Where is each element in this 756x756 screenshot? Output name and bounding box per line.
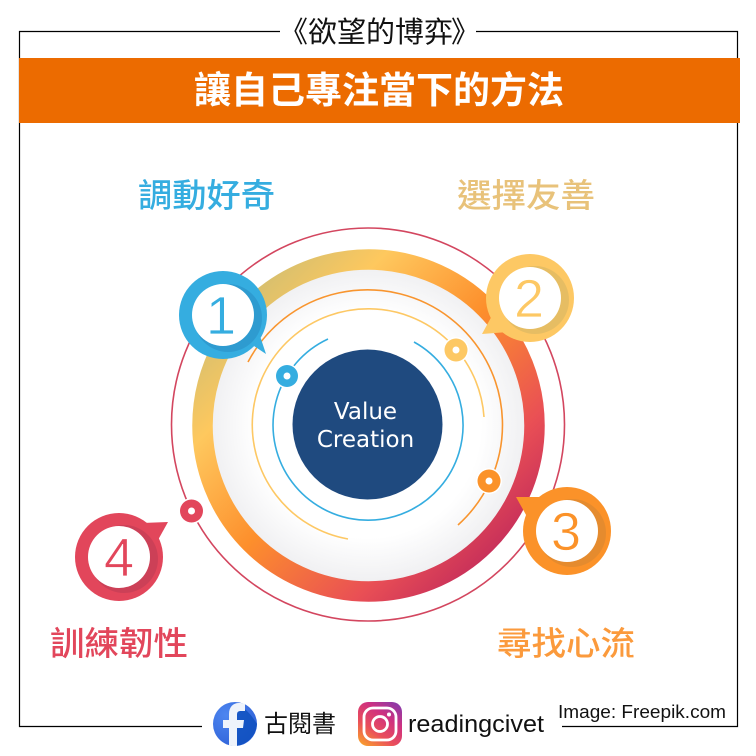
yellow arc — [252, 309, 484, 539]
outer thin ring — [172, 228, 564, 621]
badge 3 — [516, 487, 611, 575]
series title: 《 — [279, 17, 308, 49]
label 4: 訓練韌性 — [50, 625, 188, 662]
marker dot: yellow — [443, 337, 469, 363]
series title: 欲望的博弈 — [308, 16, 453, 49]
badge 3: 3 — [551, 502, 581, 562]
instagram handle: readingcivet — [408, 711, 544, 738]
marker dot: orange — [476, 468, 502, 494]
series title: 》 — [451, 17, 480, 49]
label 2: 選擇友善 — [457, 177, 595, 214]
badge 2 — [482, 254, 574, 342]
facebook logo — [213, 702, 257, 746]
facebook name: 古閱書 — [264, 711, 336, 738]
title banner: 讓自己專注當下的方法 — [194, 70, 564, 111]
label 1: 調動好奇 — [138, 177, 275, 214]
series title — [279, 16, 480, 49]
badge 4: 4 — [104, 528, 134, 588]
badge 4 — [75, 513, 168, 601]
image credit: Image: Freepik.com — [558, 702, 726, 722]
centre circle: Value — [334, 399, 397, 425]
title banner — [19, 58, 740, 123]
badge 2: 2 — [514, 269, 544, 329]
instagram logo — [358, 702, 402, 746]
centre circle — [292, 350, 442, 500]
marker dot: blue — [274, 364, 300, 388]
blue arc — [273, 339, 463, 520]
circular diagram — [172, 228, 564, 621]
thick gradient ring — [202, 260, 534, 592]
badge 1: 1 — [206, 286, 236, 346]
centre circle: Creation — [317, 427, 414, 453]
marker dot: red — [178, 498, 204, 524]
orange arc — [248, 290, 502, 525]
label 3: 尋找心流 — [497, 625, 635, 662]
badge 1 — [179, 271, 267, 359]
